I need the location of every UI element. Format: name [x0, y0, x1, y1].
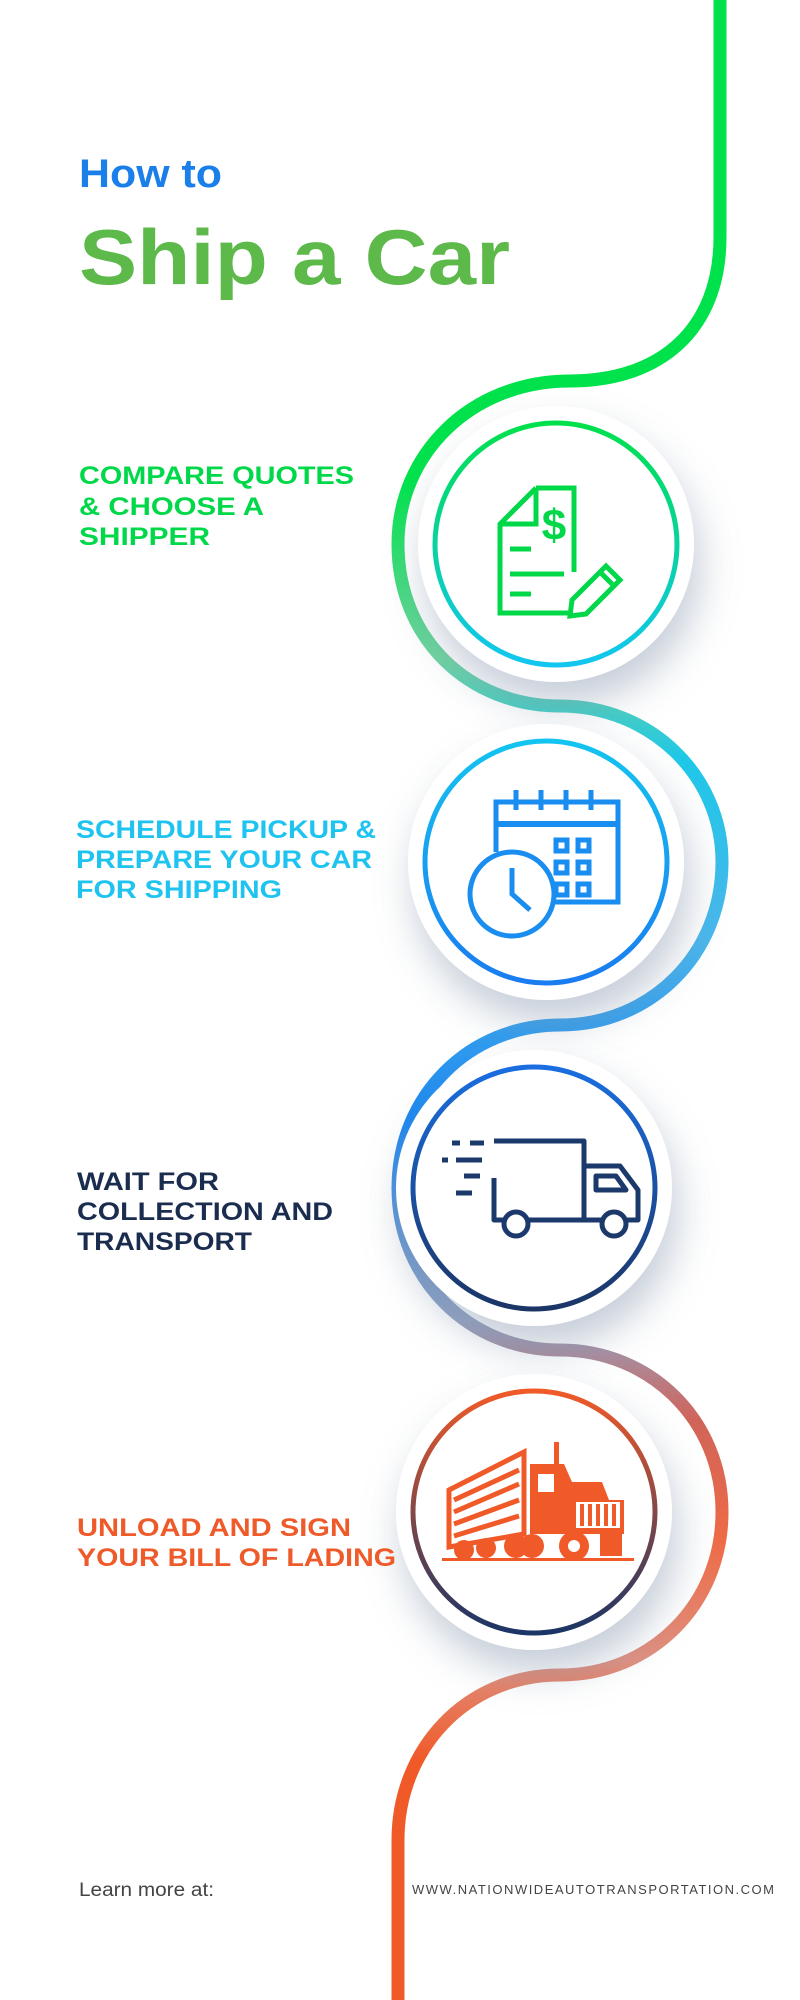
winding path line — [398, 0, 722, 2000]
step 3 panel — [77, 1050, 672, 1326]
step 1 label: SHIPPER — [79, 523, 210, 551]
icon: moving truck — [442, 1141, 638, 1236]
step 2 panel — [76, 724, 684, 1000]
step 1 label: & CHOOSE A — [79, 493, 264, 521]
title: how to: How to — [79, 152, 222, 196]
step 1 circle — [418, 406, 694, 682]
step 2 label: PREPARE YOUR CAR — [76, 846, 372, 874]
step 3 circle — [396, 1050, 672, 1326]
step 2 label — [76, 816, 376, 904]
step 4 panel — [77, 1374, 672, 1650]
step 4 label: UNLOAD AND SIGN — [77, 1514, 351, 1542]
title: ship a car: Ship a Car — [79, 213, 510, 301]
step 2 circle — [408, 724, 684, 1000]
step 2 label: SCHEDULE PICKUP & — [76, 816, 376, 844]
icon: quote document with pencil: $ — [542, 501, 566, 550]
step 4 label: YOUR BILL OF LADING — [77, 1544, 396, 1572]
step 3 label: TRANSPORT — [77, 1228, 252, 1256]
step 1 label — [79, 462, 354, 551]
step 1 label: COMPARE QUOTES — [79, 462, 354, 490]
icon: quote document with pencil — [500, 488, 620, 616]
footer: learn more: Learn more at: — [79, 1880, 214, 1901]
step 3 label: COLLECTION AND — [77, 1198, 333, 1226]
icon: semi truck — [442, 1442, 634, 1561]
step 1 panel — [79, 406, 694, 682]
step 2 label: FOR SHIPPING — [76, 876, 282, 904]
step 3 label: WAIT FOR — [77, 1168, 219, 1196]
step 3 label — [77, 1168, 333, 1256]
step 4 circle — [396, 1374, 672, 1650]
title — [79, 152, 510, 301]
footer: website url: WWW.NATIONWIDEAUTOTRANSPORTATION.COM — [412, 1882, 774, 1897]
step 4 label — [77, 1514, 396, 1572]
icon: calendar and clock — [470, 790, 618, 936]
